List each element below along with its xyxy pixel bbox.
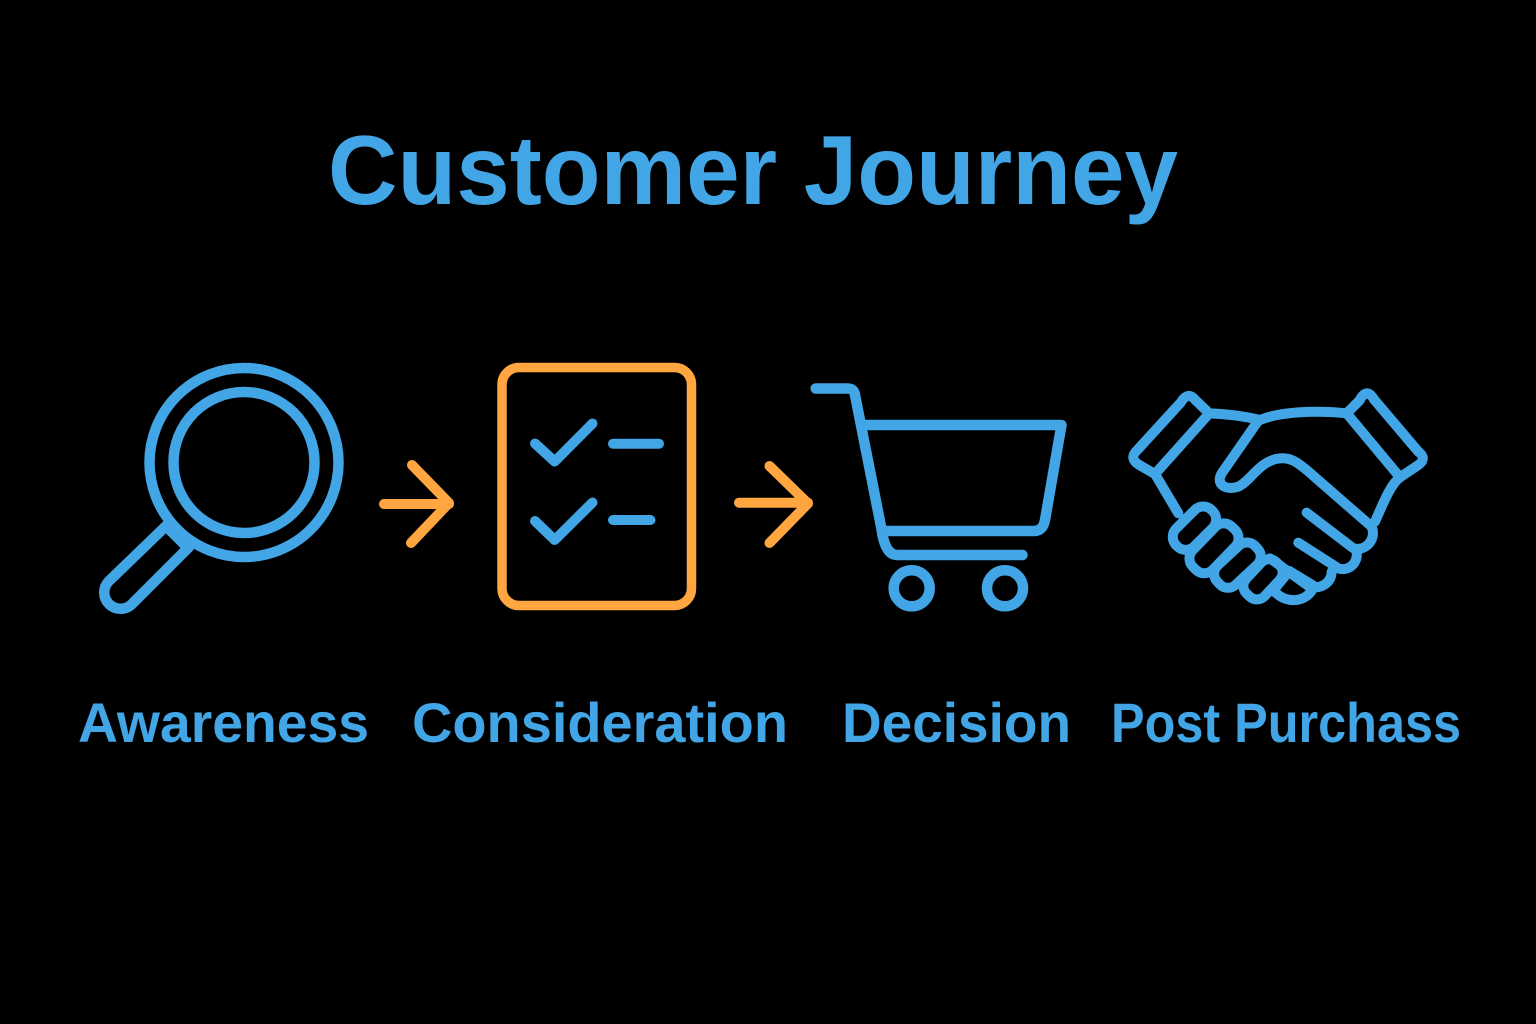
label: Decision: Decision (842, 691, 1071, 754)
arrow: Awareness to Consideration (384, 465, 449, 543)
title: Customer Journey (328, 115, 1178, 225)
checklist frame (502, 368, 692, 606)
checklist row 1 (535, 424, 659, 462)
icon: checklist (Consideration) (502, 368, 692, 606)
icon: shopping cart (Decision) (816, 388, 1062, 606)
label: Post Purchass: Post Purchass (1111, 691, 1461, 754)
label: Consideration: Consideration (412, 691, 788, 754)
arrow: Consideration to Decision (739, 466, 808, 543)
icon: handshake (Post Purchase) (1133, 393, 1423, 604)
label: Awareness: Awareness (78, 691, 369, 754)
icon: magnifying glass (Awareness) (104, 368, 338, 609)
checklist row 2 (535, 502, 650, 540)
